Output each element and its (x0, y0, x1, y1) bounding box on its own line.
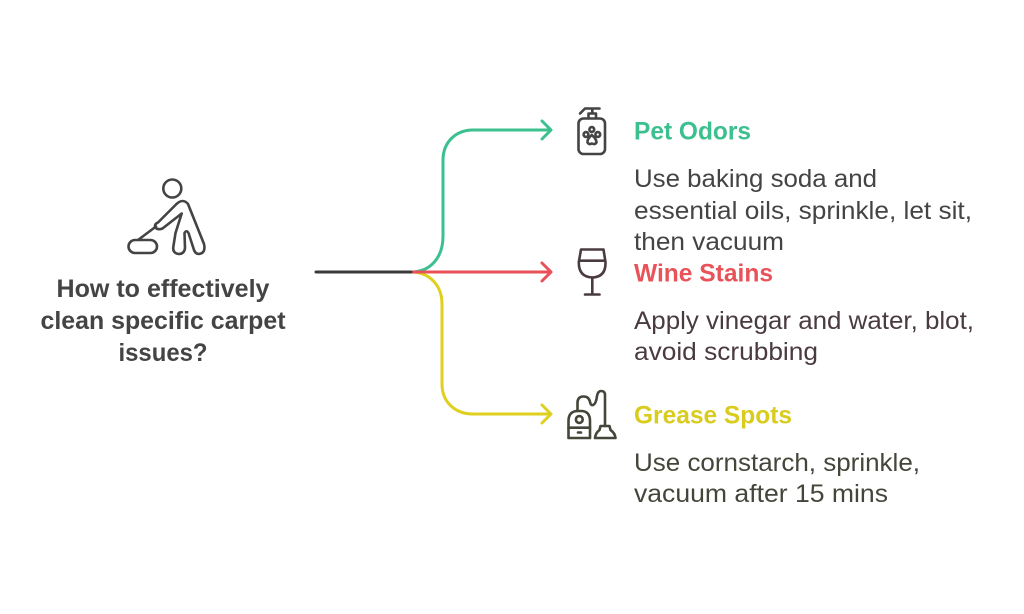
text: Wine Stains description: Apply vinegar and water, blot, (634, 307, 974, 335)
heading: Wine Stains: Wine Stains (634, 260, 773, 288)
text: Grease Spots description (634, 449, 920, 508)
title: How to effectively (56, 275, 270, 303)
connector: black stem (316, 270, 411, 274)
text: Grease Spots description: vacuum after 15 mins (634, 480, 888, 508)
connector: red arrow to Wine Stains (411, 263, 551, 281)
heading: Grease Spots: Grease Spots (634, 402, 792, 430)
title (40, 275, 286, 367)
heading: Pet Odors: Pet Odors (634, 118, 751, 146)
title: clean specific carpet (40, 307, 286, 335)
text: Wine Stains description (634, 307, 974, 366)
icon: pet shampoo bottle (578, 108, 605, 154)
text: Wine Stains description: avoid scrubbing (634, 338, 818, 366)
connector: yellow arrow to Grease Spots (411, 272, 551, 423)
text: Pet Odors description: Use baking soda and (634, 165, 877, 193)
text: Pet Odors description: essential oils, sprinkle, let sit, (634, 197, 972, 225)
text: Pet Odors description (634, 165, 972, 256)
connector: green arrow to Pet Odors (411, 121, 551, 272)
title: issues? (118, 339, 208, 367)
icon: vacuum cleaner (568, 391, 616, 438)
text: Pet Odors description: then vacuum (634, 228, 784, 256)
text: Grease Spots description: Use cornstarch, sprinkle, (634, 449, 920, 477)
icon: wine glass (579, 250, 606, 294)
icon: person vacuuming (128, 180, 204, 254)
